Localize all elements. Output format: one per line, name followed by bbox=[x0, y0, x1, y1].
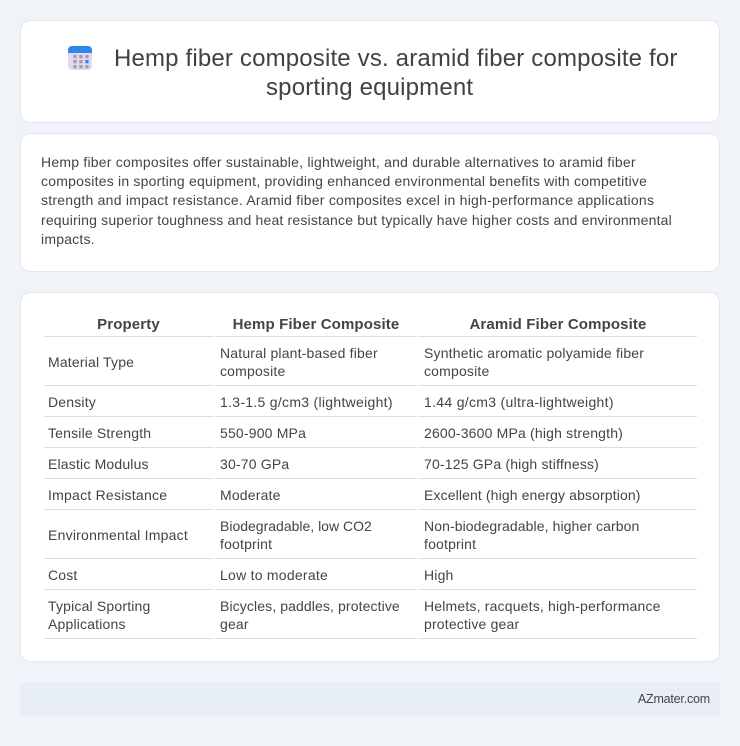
row: typical sporting applications: Helmets, racquets, high-performance bbox=[424, 598, 661, 614]
row: typical sporting applications: Applications bbox=[48, 616, 126, 632]
row: environmental impact bbox=[44, 518, 697, 559]
row: typical sporting applications: Bicycles, paddles, protective bbox=[220, 598, 400, 614]
table header row: Aramid Fiber Composite bbox=[469, 316, 647, 333]
footer bar bbox=[20, 682, 720, 716]
table card bbox=[20, 292, 720, 662]
row: impact resistance: Moderate bbox=[220, 487, 281, 503]
summary paragraph: requiring superior toughness and heat resistance but typically have higher costs and environmental bbox=[41, 212, 672, 228]
row: elastic modulus bbox=[44, 456, 697, 479]
row: environmental impact: Biodegradable, low CO2 bbox=[220, 518, 372, 534]
row: material type bbox=[44, 345, 697, 386]
summary paragraph: Hemp fiber composites offer sustainable, lightweight, and durable alternatives to aramid fiber bbox=[41, 154, 636, 170]
row: elastic modulus: 30-70 GPa bbox=[220, 456, 289, 472]
summary paragraph: composites in sporting equipment, providing enhanced environmental benefits with competitive bbox=[41, 173, 647, 189]
row: tensile strength: 2600-3600 MPa (high strength) bbox=[424, 425, 623, 441]
row: material type: composite bbox=[220, 363, 285, 379]
row: impact resistance: Excellent (high energy absorption) bbox=[424, 487, 641, 503]
row: environmental impact: Environmental Impact bbox=[48, 527, 188, 543]
summary paragraph bbox=[41, 154, 672, 247]
table header row: Property bbox=[97, 316, 160, 333]
row: typical sporting applications: Typical Sporting bbox=[48, 598, 150, 614]
row: tensile strength bbox=[44, 425, 697, 448]
row: material type: Material Type bbox=[48, 354, 134, 370]
row: environmental impact: Non-biodegradable, higher carbon bbox=[424, 518, 639, 534]
row: environmental impact: footprint bbox=[424, 536, 476, 552]
summary paragraph: impacts. bbox=[41, 231, 95, 247]
comparison table bbox=[44, 316, 697, 639]
row: typical sporting applications: gear bbox=[220, 616, 249, 632]
title text: Hemp fiber composite vs. aramid fiber composite for bbox=[114, 45, 678, 72]
table header row: Hemp Fiber Composite bbox=[233, 316, 399, 333]
title text bbox=[114, 45, 678, 101]
icon: calendar grid bbox=[68, 46, 92, 70]
row: typical sporting applications bbox=[44, 598, 697, 639]
row: material type: Natural plant-based fiber bbox=[220, 345, 378, 361]
row: cost: High bbox=[424, 567, 454, 583]
title text: sporting equipment bbox=[266, 74, 473, 101]
row: elastic modulus: 70-125 GPa (high stiffness) bbox=[424, 456, 599, 472]
row: density: Density bbox=[48, 394, 96, 410]
row: density: 1.44 g/cm3 (ultra-lightweight) bbox=[424, 394, 614, 410]
summary paragraph: strength and impact resistance. Aramid fiber composites excel in high-performance applications bbox=[41, 192, 654, 208]
row: cost: Cost bbox=[48, 567, 78, 583]
row: tensile strength: 550-900 MPa bbox=[220, 425, 306, 441]
row: impact resistance: Impact Resistance bbox=[48, 487, 167, 503]
footer brand text: AZmater.com bbox=[638, 692, 710, 706]
row: typical sporting applications: protective gear bbox=[424, 616, 519, 632]
title card bbox=[20, 20, 720, 123]
row: material type: Synthetic aromatic polyamide fiber bbox=[424, 345, 644, 361]
row: cost bbox=[44, 567, 697, 590]
row: material type: composite bbox=[424, 363, 489, 379]
row: environmental impact: footprint bbox=[220, 536, 272, 552]
row: tensile strength: Tensile Strength bbox=[48, 425, 151, 441]
row: impact resistance bbox=[44, 487, 697, 510]
table header row bbox=[44, 316, 697, 337]
row: cost: Low to moderate bbox=[220, 567, 328, 583]
summary card bbox=[20, 133, 720, 272]
row: density: 1.3-1.5 g/cm3 (lightweight) bbox=[220, 394, 393, 410]
row: density bbox=[44, 394, 697, 417]
row: elastic modulus: Elastic Modulus bbox=[48, 456, 149, 472]
